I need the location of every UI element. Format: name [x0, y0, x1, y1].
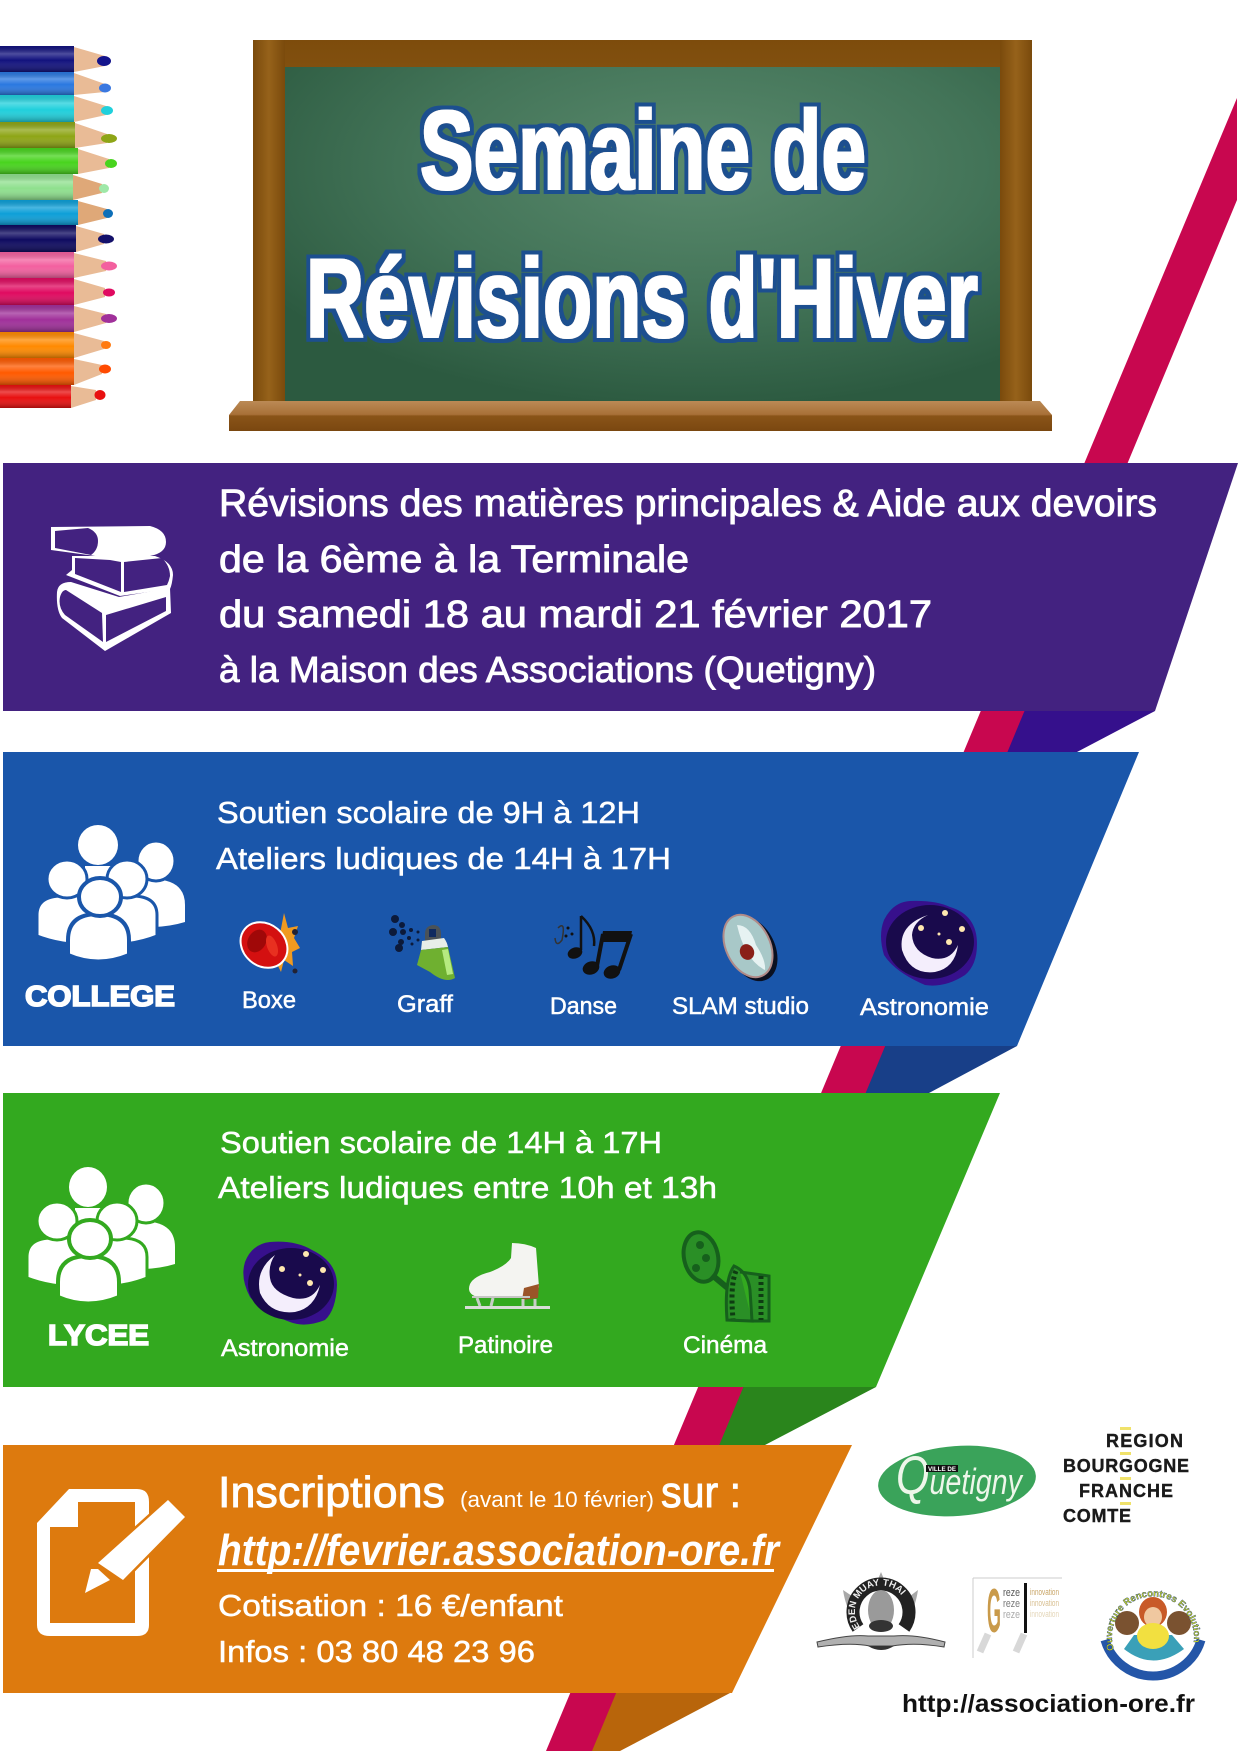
pencils [0, 46, 117, 408]
label: slam studio: SLAM studio [672, 993, 809, 1020]
icon: astronomie [243, 1242, 337, 1325]
icon: cinéma [679, 1229, 769, 1321]
icon: slam studio [714, 907, 788, 990]
link: site inscriptions: http://fevrier.association-ore.fr [218, 1526, 782, 1575]
logo: Greze Innovation: innovation [1030, 1587, 1059, 1597]
text: informations générales: à la Maison des Associations (Quetigny) [219, 649, 876, 690]
panel: lycée [3, 1093, 1000, 1387]
text: horaires lycée: Soutien scolaire de 14H à 17H [220, 1125, 662, 1160]
logo: Ouverture Rencontres Evolution: Ouverture Rencontres Evolution [1106, 1590, 1200, 1651]
logo: Greze Innovation: G [987, 1577, 1001, 1646]
text: informations générales: du samedi 18 au mardi 21 février 2017 [219, 594, 932, 636]
icon: formulaire et crayon [37, 1489, 185, 1636]
icon: graff [389, 915, 455, 980]
label: astronomie: Astronomie [860, 994, 989, 1021]
label: danse: Danse [550, 993, 617, 1020]
title [306, 88, 978, 361]
icon: group of people [27, 1167, 175, 1304]
text: inscriptions: (avant le 10 février) [460, 1487, 654, 1512]
label: patinoire: Patinoire [458, 1332, 553, 1359]
text: horaires collège: Soutien scolaire de 9H à 12H [217, 795, 640, 830]
icon: patin à glace [465, 1243, 550, 1309]
text: inscriptions [218, 1468, 741, 1517]
logo: Greze Innovation [973, 1577, 1062, 1658]
text: informations générales [219, 483, 1157, 690]
icon: books [51, 526, 173, 651]
text: cotisation et infos: Cotisation : 16 €/enfant [218, 1588, 563, 1623]
label: college: COLLEGE [25, 981, 175, 1013]
fold: orange [580, 1693, 730, 1751]
label: lycee: LYCEE [48, 1320, 149, 1352]
logo: Greze Innovation: reze [1003, 1609, 1020, 1621]
logo: Région Bourgogne Franche-Comté: FRANCHE [1079, 1481, 1173, 1501]
label: astronomie: Astronomie [221, 1335, 349, 1362]
label: graff: Graff [397, 991, 453, 1018]
logo: Eden Muay Thai [816, 1572, 946, 1650]
label: boxe: Boxe [242, 987, 296, 1014]
logo: Greze Innovation: innovation [1030, 1598, 1059, 1608]
panel: inscriptions [3, 1445, 852, 1693]
panel: collège [3, 752, 1139, 1046]
text: informations générales: de la 6ème à la Terminale [219, 539, 689, 581]
logo: Eden Muay Thai: EDEN MUAY THAI [848, 1578, 906, 1630]
text: inscriptions: sur : [661, 1468, 741, 1517]
label: cinéma: Cinéma [683, 1332, 768, 1359]
text: cotisation et infos [218, 1588, 563, 1669]
text: horaires lycée [218, 1125, 717, 1205]
text: cotisation et infos: Infos : 03 80 48 23 96 [218, 1634, 535, 1669]
fold: blue [850, 1046, 1017, 1093]
chalkboard [229, 40, 1052, 431]
logo: Greze Innovation: reze [1003, 1598, 1020, 1610]
text: horaires lycée: Ateliers ludiques entre 10h et 13h [218, 1170, 717, 1205]
text: informations générales: Révisions des matières principales & Aide aux devoirs [219, 483, 1157, 525]
fold: purple [995, 711, 1155, 752]
text: horaires collège [216, 795, 671, 876]
logo: Région Bourgogne Franche-Comté: COMTE [1063, 1506, 1131, 1526]
icon: astronomie [881, 901, 977, 986]
crimson ribbon [546, 98, 1237, 1751]
logo: Greze Innovation: innovation [1030, 1609, 1059, 1619]
title: Révisions d'Hiver [306, 236, 978, 361]
logo: Quetigny: Quetigny [896, 1446, 1024, 1506]
logo: Région Bourgogne Franche-Comté [1063, 1427, 1189, 1526]
text: horaires collège: Ateliers ludiques de 14H à 17H [216, 841, 671, 876]
icon: boxe [231, 913, 300, 977]
title: Semaine de [420, 88, 866, 213]
logo: Quetigny [876, 1441, 1038, 1521]
logo: Quetigny: VILLE DE [928, 1467, 956, 1473]
website url: http://association-ore.fr [902, 1690, 1195, 1718]
panel: révisions [3, 463, 1238, 711]
icon: danse [555, 916, 632, 980]
logo: Région Bourgogne Franche-Comté: REGION [1106, 1431, 1183, 1451]
icon: group of people [37, 825, 185, 962]
logo: Région Bourgogne Franche-Comté: BOURGOGNE [1063, 1456, 1189, 1476]
logo: Greze Innovation: reze [1003, 1587, 1020, 1599]
fold: green [705, 1387, 876, 1445]
text: inscriptions: Inscriptions [218, 1468, 445, 1517]
logo: Ouverture Rencontres Evolution [1100, 1590, 1206, 1680]
